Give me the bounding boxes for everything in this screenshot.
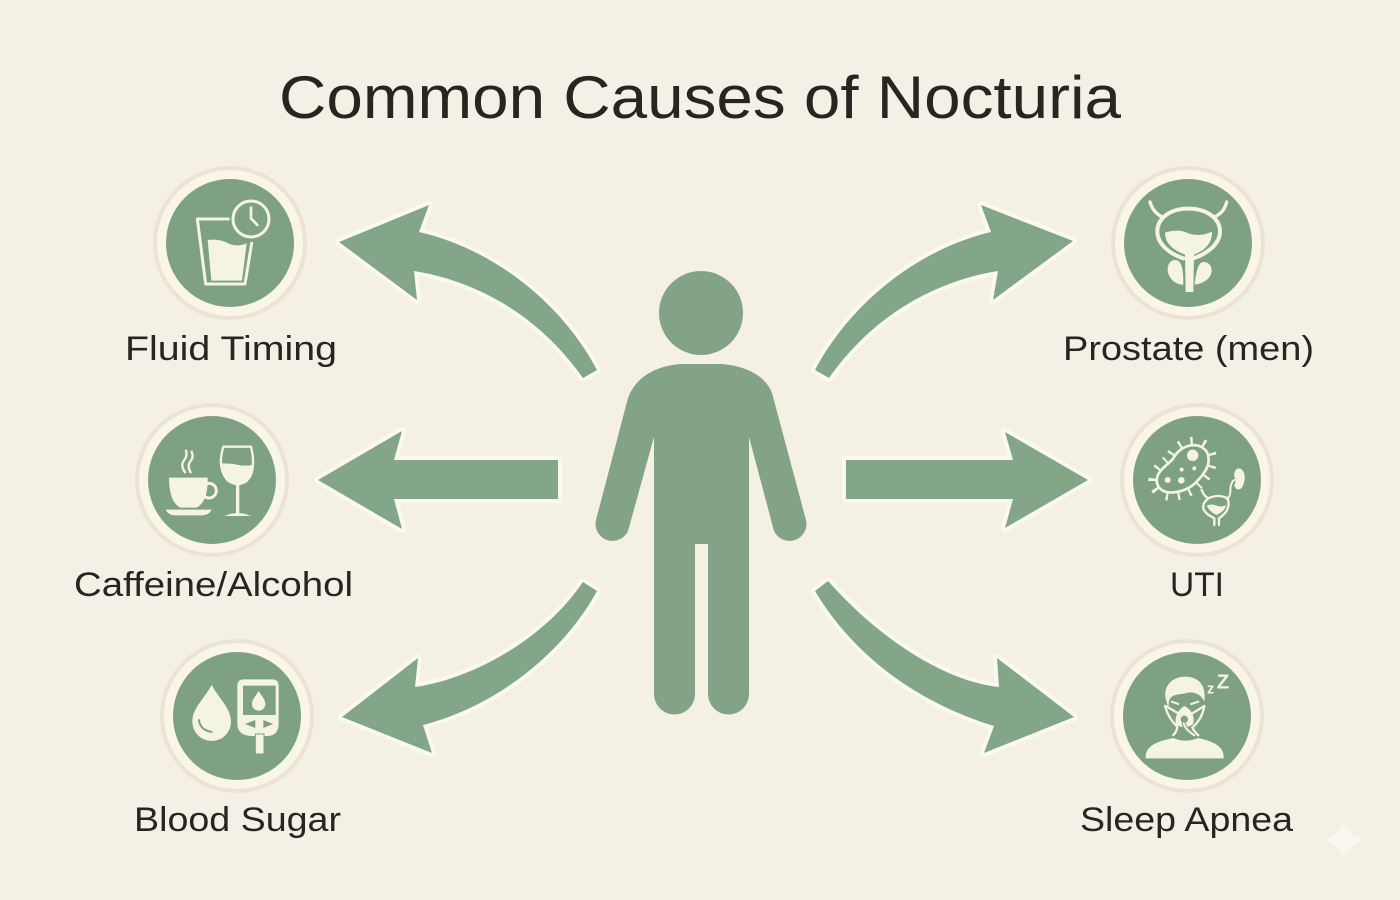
- arrow: to caffeine/alcohol: [318, 431, 558, 529]
- icon: sparkle watermark: [1324, 820, 1366, 860]
- arrow: to fluid timing: [339, 205, 597, 378]
- icon: sleep apnea: Z: [1217, 670, 1230, 693]
- label: fluid timing: Fluid Timing: [125, 330, 337, 368]
- arrow: to blood sugar: [342, 582, 597, 753]
- icon: caffeine and alcohol: [137, 405, 287, 555]
- arrow: to prostate: [815, 205, 1073, 378]
- label: prostate: Prostate (men): [1063, 330, 1314, 368]
- icon: UTI: [1122, 405, 1272, 555]
- icon: prostate: [1113, 168, 1263, 318]
- icon: sleep apnea: [1112, 641, 1262, 791]
- icon: fluid timing: [155, 168, 305, 318]
- title: Common Causes of Nocturia: [279, 64, 1122, 131]
- label: blood sugar: Blood Sugar: [134, 801, 341, 839]
- label: UTI: UTI: [1170, 566, 1224, 604]
- arrow: to UTI: [846, 432, 1088, 528]
- label: caffeine/alcohol: Caffeine/Alcohol: [74, 566, 353, 604]
- central person figure: [596, 271, 806, 714]
- icon: sleep apnea: z: [1207, 681, 1214, 697]
- label: sleep apnea: Sleep Apnea: [1080, 801, 1293, 839]
- arrow: to sleep apnea: [815, 581, 1074, 753]
- icon: blood sugar: [162, 641, 312, 791]
